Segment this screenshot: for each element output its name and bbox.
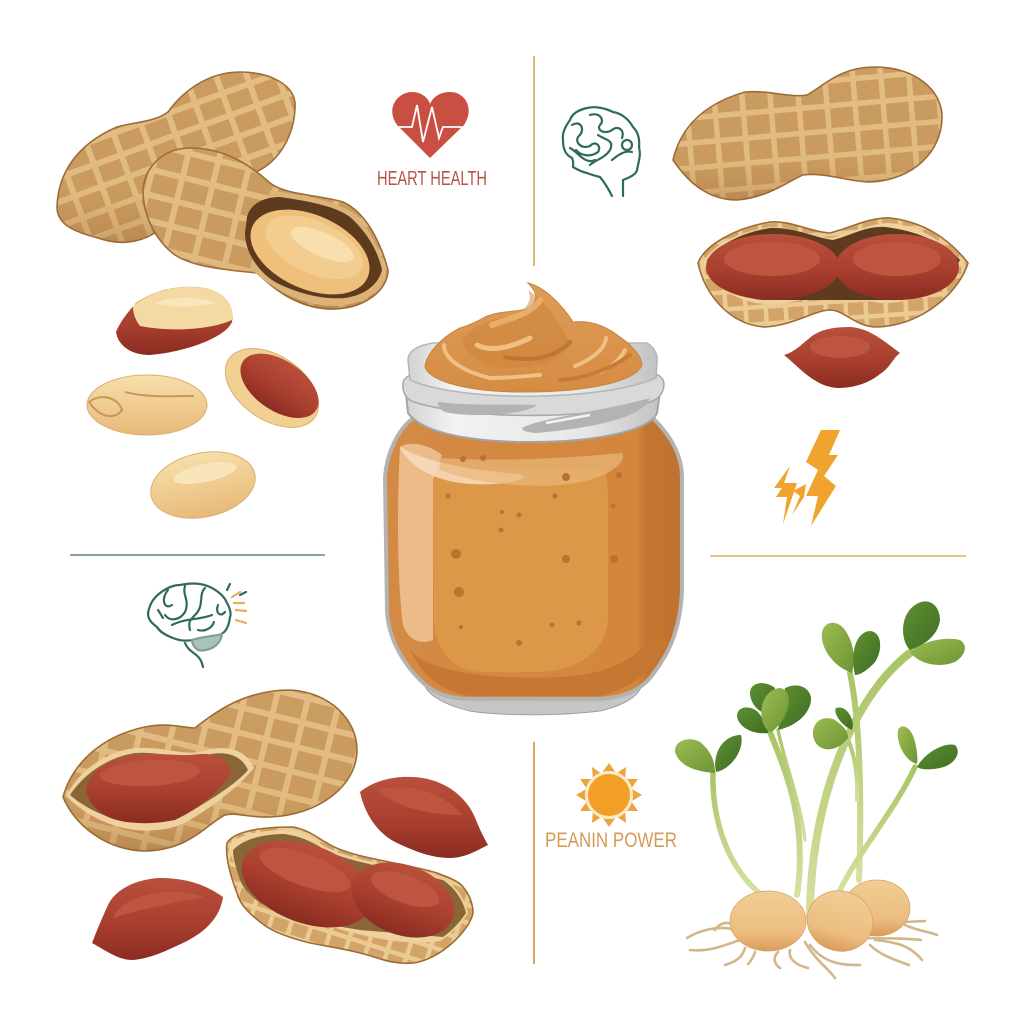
open shell, front (143, 148, 388, 309)
shell inner rim (703, 223, 963, 304)
shell cavity (70, 753, 248, 823)
cream kernel in shell (237, 193, 383, 311)
loose red kernel right (360, 777, 488, 858)
red kernels in lower shell (230, 824, 465, 951)
stems (713, 653, 915, 917)
divider: left horizontal (70, 554, 325, 556)
peanut sprouts (675, 601, 965, 978)
kernel: red with cream edge (211, 332, 333, 444)
red kernels in shell (706, 234, 959, 300)
loose red kernel (784, 327, 900, 388)
red kernel in shell (86, 754, 231, 823)
lighter center panel (433, 470, 608, 672)
open shell lower (227, 827, 473, 963)
jar lid ring (403, 343, 664, 442)
smooth shell rim (250, 190, 386, 306)
whole peanut shell, back (57, 72, 295, 242)
peanuts: bottom left group (63, 690, 488, 963)
kernel: cream half (87, 375, 207, 435)
label: heart health: HEART HEALTH (377, 168, 487, 190)
icon: brain head profile (563, 107, 640, 196)
peanut butter jar (385, 283, 682, 715)
icon: heart health (377, 92, 487, 190)
icon: sun (545, 763, 677, 852)
divider: right horizontal (710, 555, 966, 557)
jar base (423, 680, 643, 715)
shell cavity (233, 834, 466, 937)
shell inner rim (66, 748, 254, 831)
peanut bulbs (730, 880, 910, 959)
label: peanin power: PEANIN POWER (545, 829, 677, 852)
shell inner rim (229, 830, 468, 942)
jar highlights (398, 444, 623, 646)
divider: bottom vertical (533, 742, 535, 964)
shell cavity (707, 227, 960, 300)
roots (687, 921, 937, 978)
peanut butter swirl (425, 283, 642, 392)
sun rays (576, 763, 642, 827)
kernel: cream whole (145, 443, 261, 527)
open shell (698, 218, 968, 327)
whole peanut shell (673, 67, 942, 200)
icon: brain with sparks (148, 584, 246, 667)
icon: energy lightning bolts (774, 430, 840, 526)
peanuts: top left group (57, 72, 388, 527)
heart with pulse (392, 92, 469, 158)
butter lower band (410, 640, 668, 696)
jar body (385, 418, 682, 699)
peanuts: top right group (673, 67, 968, 388)
loose red kernel left (92, 878, 223, 960)
kernel: half skinned (116, 287, 232, 355)
open peanut shell (63, 690, 357, 851)
leaves (675, 601, 965, 773)
sun disc (586, 772, 632, 818)
divider: top vertical (533, 56, 535, 266)
shell cavity (245, 197, 382, 298)
